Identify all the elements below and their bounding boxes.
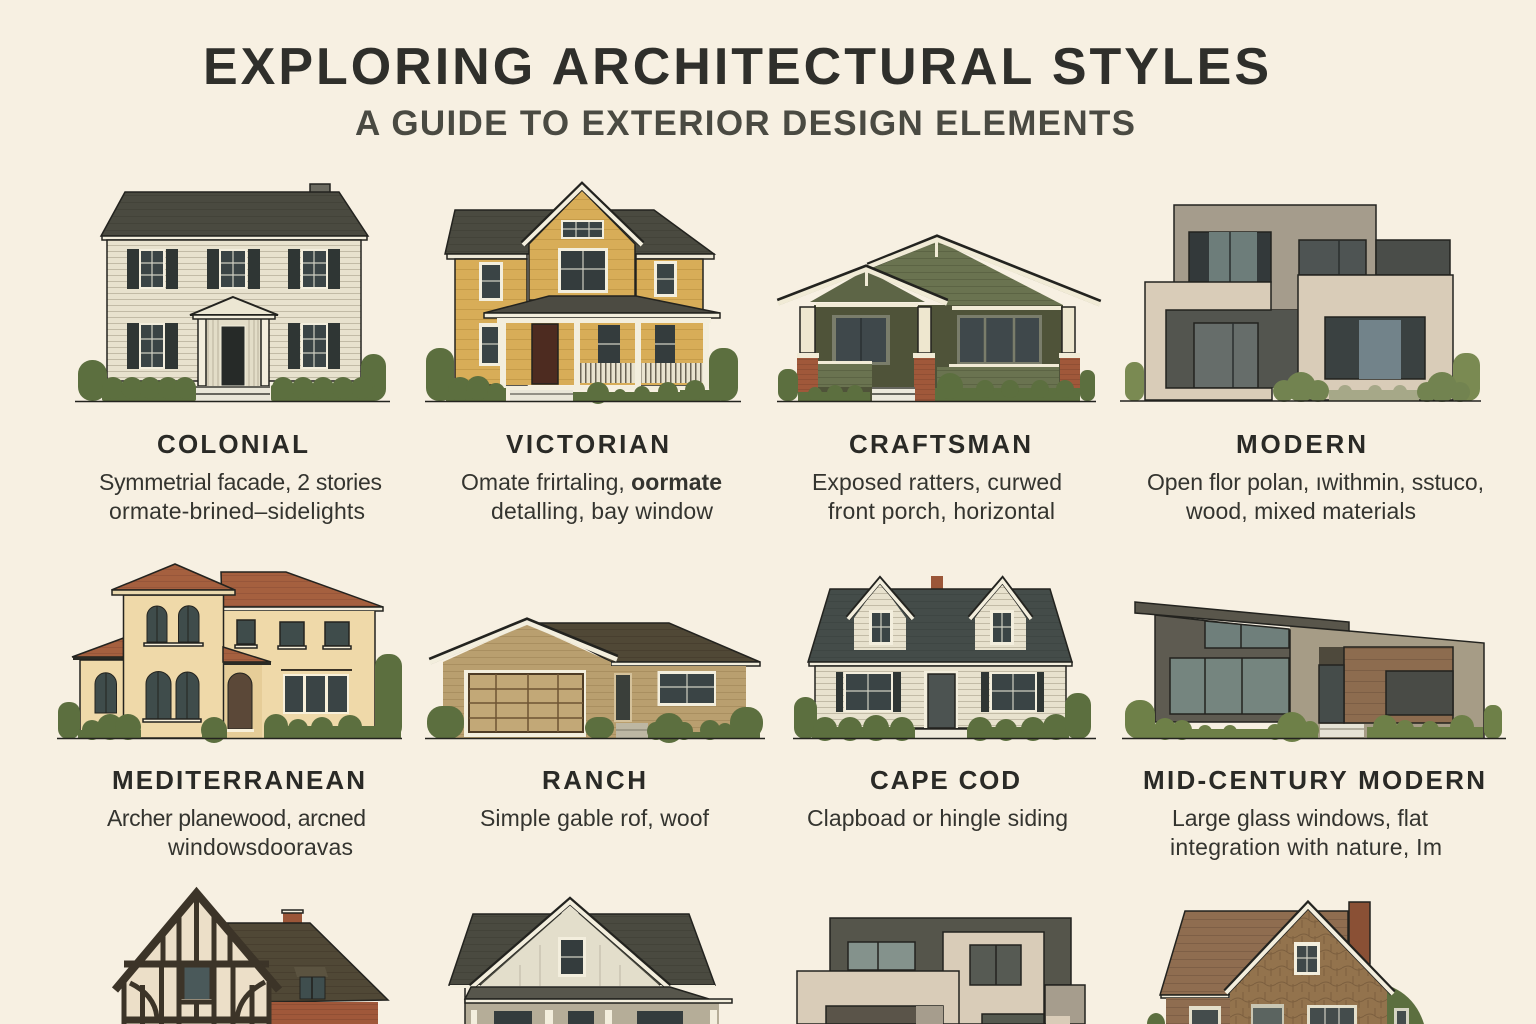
description line 2: integration with nature, Im bbox=[1170, 834, 1442, 860]
illustration: cape cod house bbox=[793, 576, 1096, 741]
panel: craftsman bbox=[777, 238, 1100, 524]
panel: tudor bbox=[115, 893, 388, 1024]
illustration: farmhouse bbox=[449, 901, 732, 1024]
heading: MID-CENTURY MODERN bbox=[1143, 765, 1485, 795]
panel: victorian bbox=[425, 186, 741, 524]
description line 2: front porch, horizontal bbox=[828, 498, 1055, 524]
heading: MEDITERRANEAN bbox=[112, 765, 365, 795]
description: Exposed ratters, curwed bbox=[812, 469, 1062, 495]
description: Large glass windows, flat bbox=[1172, 805, 1429, 831]
description: Omate frirtaling, oormate bbox=[461, 469, 722, 495]
panel: farmhouse bbox=[449, 901, 732, 1024]
description line 2: ormate-brined–sidelights bbox=[109, 498, 365, 524]
description line 2: wood, mixed materials bbox=[1185, 498, 1416, 524]
panel: cape cod bbox=[793, 576, 1096, 831]
heading: CAPE COD bbox=[870, 765, 1020, 795]
subtitle: A GUIDE TO EXTERIOR DESIGN ELEMENTS bbox=[355, 104, 1135, 143]
panel: mid-century modern bbox=[1122, 602, 1506, 860]
heading: VICTORIAN bbox=[506, 429, 669, 459]
description: Clapboad or hingle siding bbox=[807, 805, 1068, 831]
panel: mediterranean bbox=[57, 564, 402, 860]
heading: MODERN bbox=[1236, 429, 1366, 459]
panel: modern bbox=[1120, 205, 1484, 524]
description line 2: detalling, bay window bbox=[491, 498, 713, 524]
panel: cottage bbox=[1147, 902, 1424, 1024]
panel: contemporary bbox=[797, 918, 1085, 1024]
heading: COLONIAL bbox=[157, 429, 308, 459]
description: Symmetrial facade, 2 stories bbox=[99, 469, 382, 495]
illustration: mid-century modern house bbox=[1122, 602, 1506, 742]
description: Open flor polan, ıwithmin, sstuco, bbox=[1147, 469, 1484, 495]
illustration: tudor house bbox=[115, 893, 388, 1024]
illustration: ranch house bbox=[425, 621, 765, 743]
heading: CRAFTSMAN bbox=[849, 429, 1031, 459]
panel: colonial bbox=[75, 184, 390, 524]
illustration: colonial house bbox=[75, 184, 390, 402]
title: EXPLORING ARCHITECTURAL STYLES bbox=[203, 38, 1269, 96]
illustration: contemporary house bbox=[797, 918, 1085, 1024]
illustration: cottage house bbox=[1147, 902, 1424, 1024]
illustration: craftsman house bbox=[777, 238, 1100, 402]
illustration: modern house bbox=[1120, 205, 1481, 402]
description: Simple gable rof, woof bbox=[480, 805, 710, 831]
description line 2: windowsdooravas bbox=[167, 834, 353, 860]
illustration: victorian house bbox=[425, 186, 741, 404]
illustration: mediterranean house bbox=[57, 564, 402, 743]
panel: ranch bbox=[425, 621, 765, 831]
description: Archer planewood, arcned bbox=[107, 805, 366, 831]
heading: RANCH bbox=[542, 765, 646, 795]
